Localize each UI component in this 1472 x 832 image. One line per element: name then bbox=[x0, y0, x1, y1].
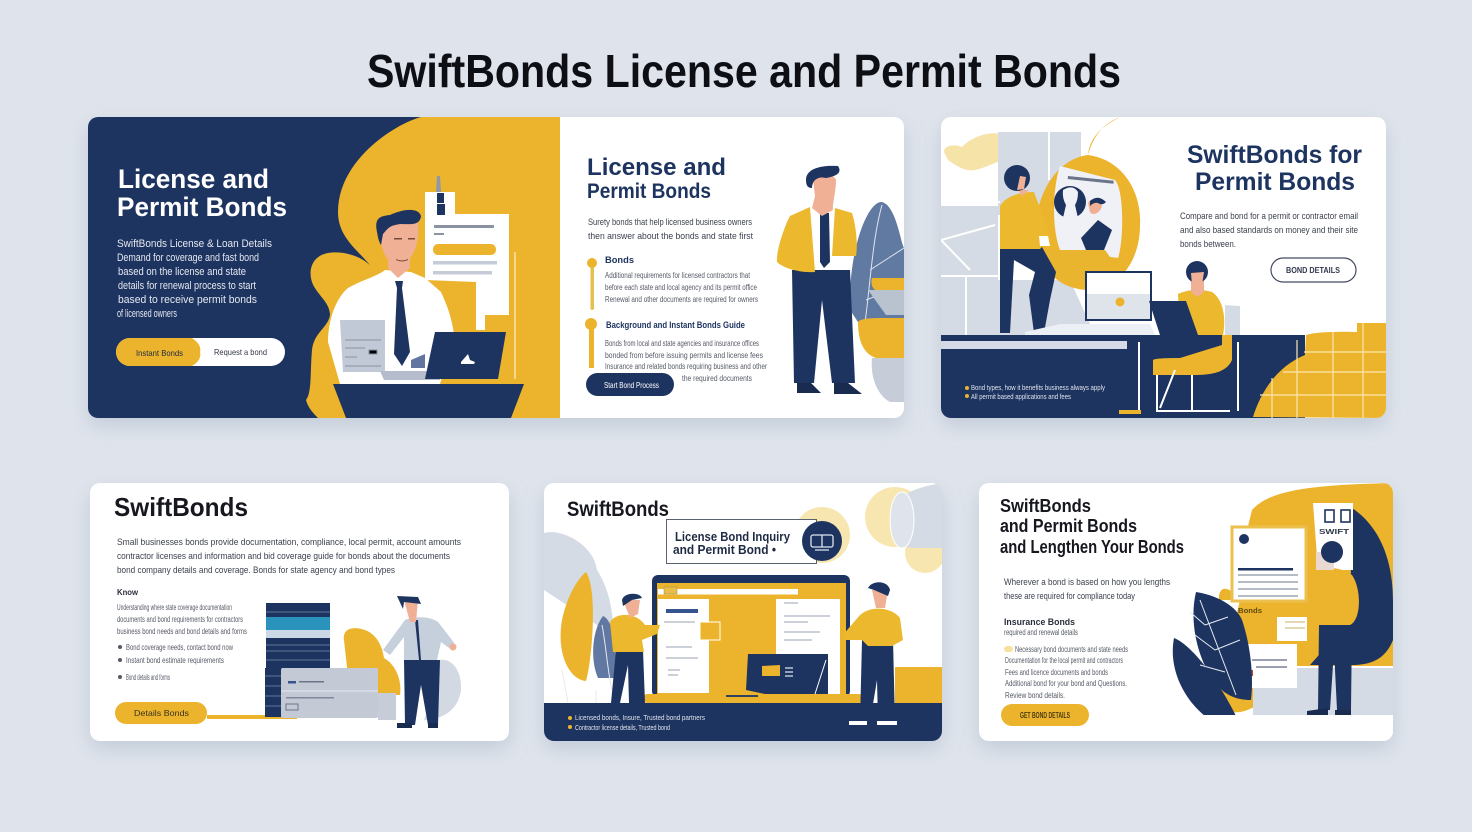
small text: documents and bond requirements for contractors bbox=[117, 615, 243, 624]
small document cards bbox=[1241, 617, 1307, 688]
bullet list bbox=[118, 643, 233, 682]
paper stack bbox=[340, 320, 385, 372]
monitor bbox=[1085, 271, 1152, 321]
button pair: Request a bond bbox=[214, 347, 267, 357]
tie bbox=[394, 281, 410, 366]
body text bbox=[117, 238, 272, 320]
right sub-panel intro text: Surety bonds that help licensed business owners bbox=[588, 217, 752, 228]
heading bbox=[1000, 496, 1184, 557]
timeline item: bonds: Bonds bbox=[605, 255, 634, 265]
neck and face bbox=[388, 252, 410, 278]
illustration: man at laptop bbox=[328, 176, 524, 418]
callout box with icon bbox=[666, 520, 842, 564]
laptop bbox=[644, 575, 862, 703]
heading: swiftbonds for permit bonds: Permit Bonds bbox=[1195, 168, 1355, 196]
pale yellow cloud bbox=[944, 133, 998, 170]
left person bbox=[610, 594, 660, 703]
desk surface bbox=[1025, 324, 1155, 335]
body text bbox=[1180, 211, 1358, 250]
blue leaf bbox=[593, 616, 616, 678]
white footer bbox=[1165, 715, 1393, 741]
bullet list: Instant bond estimate requirements bbox=[126, 656, 224, 665]
panel: license and permit bonds wide card bbox=[88, 117, 904, 418]
yellow backdrop bbox=[1219, 483, 1393, 712]
body text: SwiftBonds License & Loan Details bbox=[117, 238, 272, 250]
grey foliage bbox=[544, 532, 613, 635]
panel: swiftbonds lengthen your bonds bbox=[979, 483, 1393, 741]
highlighted list text: Review bond details. bbox=[1005, 691, 1065, 700]
hair bbox=[376, 210, 421, 245]
navy stack bbox=[265, 603, 330, 717]
grey bar bbox=[941, 341, 1127, 349]
large leaf bbox=[1173, 592, 1252, 716]
right sub-panel intro text bbox=[588, 217, 753, 242]
bullet list: Bond coverage needs, contact bond now bbox=[126, 643, 233, 652]
small text: business bond needs and bond details and forms bbox=[117, 627, 247, 636]
trousers bbox=[792, 270, 855, 383]
timeline item: bonds bbox=[587, 255, 758, 310]
button: GET BOND DETAILS bbox=[1020, 711, 1070, 720]
body text: bonds between. bbox=[1180, 239, 1236, 250]
footer notes: Bond types, how it benefits business always apply bbox=[971, 383, 1105, 392]
pale decorative circles bbox=[794, 483, 945, 573]
illustration: person with documents: SWIFT bbox=[1319, 529, 1350, 536]
subheading: Know bbox=[117, 588, 139, 597]
highlighted list text bbox=[1004, 645, 1128, 700]
navy footer band bbox=[544, 703, 942, 741]
illustration: stacked bonds and man bbox=[265, 596, 461, 728]
panel: swiftbonds stacked documents bbox=[90, 483, 509, 741]
timeline item: bonds: before each state and local agency and its permit office bbox=[605, 283, 757, 292]
navy arc bbox=[1310, 508, 1393, 665]
right sub-panel heading: Permit Bonds bbox=[587, 180, 711, 203]
button: get started bbox=[586, 373, 674, 396]
hair bbox=[806, 166, 840, 188]
right sub-panel heading bbox=[587, 154, 726, 203]
button pair: Instant Bonds bbox=[136, 348, 183, 358]
body text: Small businesses bonds provide documentation, compliance, local permit, account amounts bbox=[117, 537, 461, 548]
yellow blob background bbox=[306, 117, 560, 418]
neck and face bbox=[812, 175, 836, 216]
small text: Understanding where state coverage documentation bbox=[117, 603, 232, 612]
body text: of licensed owners bbox=[117, 308, 177, 320]
yellow base under ring bbox=[1060, 250, 1110, 257]
right sub-panel heading: License and bbox=[587, 154, 726, 181]
small text bbox=[117, 603, 247, 636]
body text bbox=[1004, 577, 1170, 602]
grey building shapes bbox=[941, 132, 1095, 335]
highlighted list text: Fees and licence documents and bonds bbox=[1005, 668, 1108, 677]
body text: Demand for coverage and fast bond bbox=[117, 252, 259, 264]
seated person bbox=[1119, 261, 1240, 414]
footer notes: Licensed bonds, Insure, Trusted bond partners bbox=[575, 713, 705, 722]
standing man bbox=[383, 596, 456, 728]
body text bbox=[117, 537, 461, 576]
grey backdrop bbox=[872, 358, 904, 402]
button: outline: BOND DETAILS bbox=[1286, 266, 1341, 275]
timeline item: license and permit: the required documents bbox=[682, 374, 752, 383]
button bbox=[1001, 704, 1089, 726]
heading: swiftbonds for permit bonds bbox=[1187, 141, 1362, 196]
title: SwiftBonds License and Permit Bonds bbox=[367, 45, 1121, 97]
panel: swiftbonds laptop scene bbox=[544, 483, 945, 741]
timeline item: license and permit: Bonds from local and state agencies and insurance offices bbox=[605, 339, 759, 348]
body text: bond company details and coverage. Bonds for state agency and bond types bbox=[117, 565, 395, 576]
heading: license and permit bonds bbox=[117, 164, 287, 222]
body text: based to receive permit bonds bbox=[118, 294, 257, 306]
callout box with icon: and Permit Bond • bbox=[673, 543, 776, 557]
footer notes: All permit based applications and fees bbox=[971, 392, 1071, 401]
yellow boxes bbox=[871, 278, 904, 290]
jacket bbox=[777, 207, 857, 272]
heading: swiftbonds for permit bonds: SwiftBonds for bbox=[1187, 141, 1362, 169]
back document bbox=[1313, 503, 1353, 570]
leaf bbox=[850, 202, 904, 322]
person from behind bbox=[1307, 541, 1359, 716]
bullet list: Bond details and forms bbox=[126, 673, 170, 682]
button: outline bbox=[1271, 258, 1356, 282]
subheading: Insurance Bonds bbox=[1004, 617, 1075, 627]
timeline item: bonds: Additional requirements for licensed contractors that bbox=[605, 271, 751, 280]
timeline item: license and permit: Insurance and related bonds requiring business and other bbox=[605, 362, 767, 371]
desk bbox=[333, 384, 524, 418]
body text: based on the license and state bbox=[118, 266, 246, 278]
profile document bbox=[1054, 166, 1122, 258]
callout box with icon: License Bond Inquiry bbox=[675, 530, 790, 544]
tie bbox=[820, 213, 830, 268]
right sub-panel intro text: then answer about the bonds and state first bbox=[588, 231, 753, 242]
document bbox=[425, 192, 509, 330]
illustration: standing man with leaves bbox=[777, 166, 904, 402]
footer notes bbox=[568, 713, 705, 732]
button and connector bbox=[115, 702, 297, 724]
button pair bbox=[116, 338, 285, 366]
timeline item: license and permit: bonded from before issuing permits and license fees bbox=[605, 351, 763, 360]
timeline item: bonds: Renewal and other documents are required for owners bbox=[605, 295, 758, 304]
body text: Compare and bond for a permit or contractor email bbox=[1180, 211, 1358, 222]
timeline item: license and permit: Background and Instant Bonds Guide bbox=[606, 320, 745, 330]
bottom yellow ledge bbox=[895, 667, 942, 703]
timeline item: license and permit bbox=[585, 318, 767, 383]
divider text: required and renewal details bbox=[1004, 628, 1078, 637]
body text: details for renewal process to start bbox=[118, 280, 256, 292]
highlighted list text: Documentation for the local permit and contractors bbox=[1005, 656, 1123, 665]
body text: contractor licenses and information and bid coverage guide for bonds about the documents bbox=[117, 551, 450, 562]
laptop bbox=[425, 332, 506, 379]
illustration: person with documents bbox=[1165, 483, 1393, 741]
heading: and Lengthen Your Bonds bbox=[1000, 537, 1184, 557]
grey bond card bbox=[281, 668, 378, 718]
right person bbox=[842, 582, 903, 725]
grey floor bbox=[1253, 668, 1393, 715]
left navy background bbox=[88, 117, 421, 418]
heading: and Permit Bonds bbox=[1000, 516, 1137, 536]
grey leaf bbox=[424, 660, 461, 720]
yellow leaf bbox=[561, 572, 593, 681]
heading: SwiftBonds bbox=[567, 498, 669, 521]
footer notes: Contractor license details, Trusted bond bbox=[575, 723, 670, 732]
body text: Wherever a bond is based on how you lengths bbox=[1004, 577, 1170, 588]
main document bbox=[1232, 527, 1306, 615]
shoes bbox=[797, 383, 862, 394]
shirt bbox=[810, 208, 838, 270]
button: get started: Start Bond Process bbox=[604, 381, 659, 390]
heading: license and permit bonds: Permit Bonds bbox=[117, 192, 287, 222]
yellow ring and tail bbox=[1036, 117, 1140, 290]
panel: swiftbonds for permit bonds bbox=[941, 117, 1386, 418]
heading: license and permit bonds: License and bbox=[118, 164, 269, 194]
highlighted list text: Necessary bond documents and state needs bbox=[1015, 645, 1128, 654]
main document: Bonds bbox=[1238, 608, 1262, 615]
shirt bbox=[328, 270, 454, 384]
body text: and also based standards on money and their site bbox=[1180, 225, 1358, 236]
heading: SwiftBonds bbox=[114, 492, 248, 522]
yellow blob bbox=[344, 628, 400, 695]
standing woman bbox=[1000, 165, 1056, 334]
button and connector: Details Bonds bbox=[134, 708, 189, 718]
illustration: office scene bbox=[941, 117, 1386, 418]
heading: SwiftBonds bbox=[1000, 496, 1091, 516]
yellow grid block bbox=[1253, 323, 1386, 418]
footer notes bbox=[965, 383, 1105, 401]
navy floor band bbox=[941, 335, 1305, 418]
highlighted list text: Additional bond for your bond and Questions. bbox=[1005, 679, 1127, 688]
body text: these are required for compliance today bbox=[1004, 591, 1135, 602]
